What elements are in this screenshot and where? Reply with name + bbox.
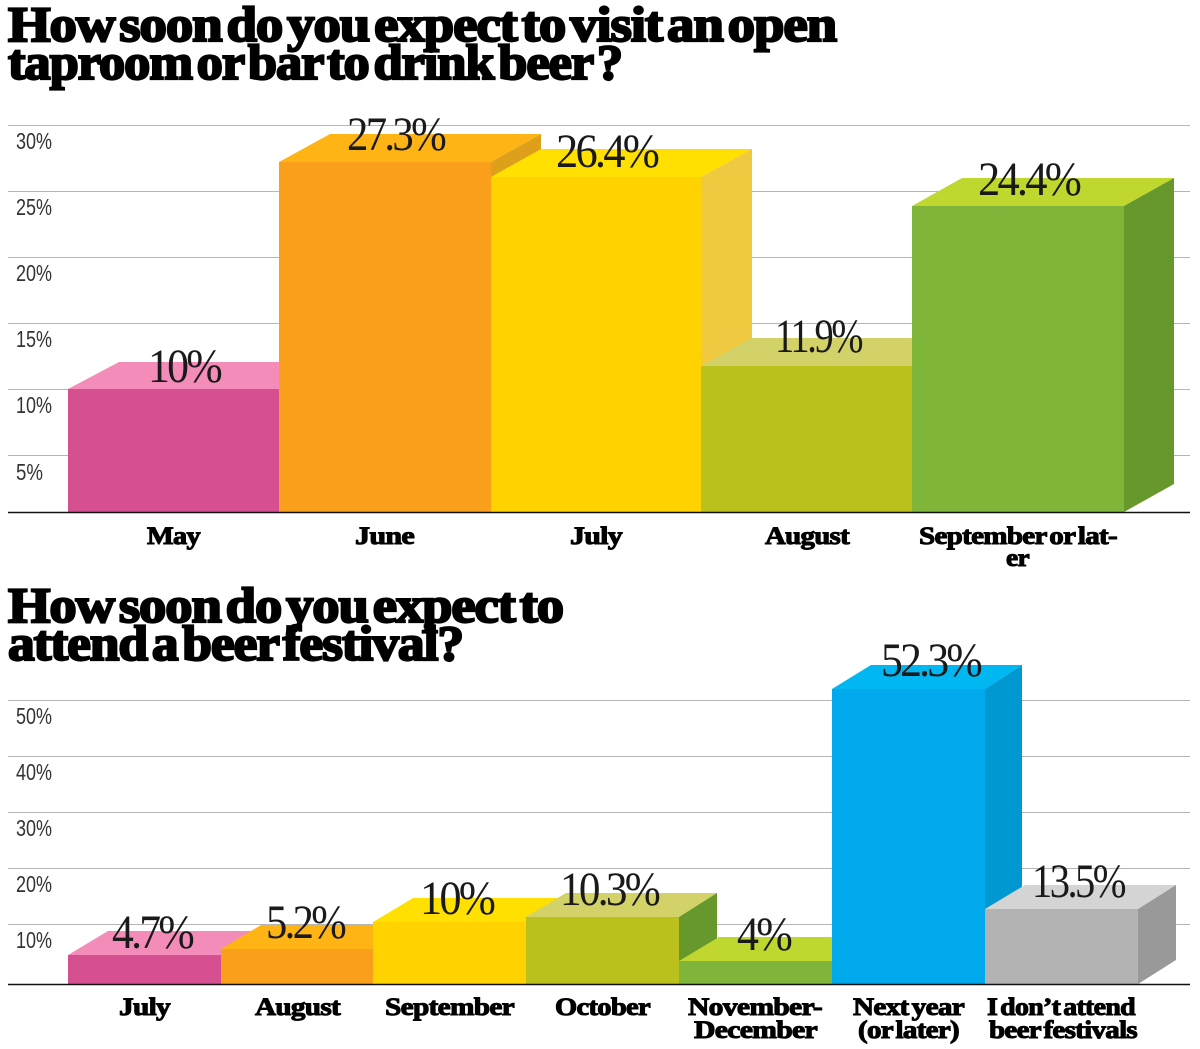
bar: June 27.3% [279, 134, 541, 512]
gridlines and y axis labels: 25% [16, 194, 52, 220]
value labels: 4% [737, 908, 792, 961]
value labels [148, 108, 1081, 393]
category labels [147, 523, 1117, 572]
gridlines and y axis labels: 20% [16, 871, 52, 897]
title: festival question: How soon do you expect to [8, 577, 563, 633]
bar: July 26.4% [491, 149, 752, 512]
value labels: 26.4% [556, 125, 659, 178]
bar: September or later 24.4% [912, 178, 1174, 512]
bar: Next year 52.3% [832, 665, 1022, 984]
category labels: Next year [853, 994, 965, 1021]
bar: September 10% [373, 898, 566, 984]
category labels: September or lat- [919, 523, 1117, 550]
category labels: August [765, 523, 850, 550]
category labels: er [1006, 545, 1030, 572]
value labels [112, 634, 1126, 961]
value labels: 10% [420, 872, 495, 925]
category labels: August [255, 994, 341, 1021]
gridlines and y axis labels: 10% [16, 392, 52, 418]
category labels: (or later) [858, 1017, 959, 1044]
gridlines and y axis labels [8, 126, 1190, 485]
bar: August 5.2% [221, 925, 413, 984]
category labels: October [555, 994, 651, 1021]
chart: beer festival timing [8, 634, 1190, 1044]
gridlines and y axis labels: 40% [16, 759, 52, 785]
value labels: 11.9% [775, 310, 863, 363]
bar: October 10.3% [526, 893, 717, 984]
value labels: 10.3% [560, 863, 660, 916]
gridlines and y axis labels: 5% [16, 459, 43, 485]
bar: May 10% [68, 362, 330, 512]
value labels: 24.4% [978, 153, 1081, 206]
gridlines and y axis labels: 15% [16, 326, 52, 352]
value labels: 10% [148, 340, 222, 393]
gridlines and y axis labels: 30% [16, 815, 52, 841]
category labels: June [355, 523, 415, 550]
category labels: I don’t attend [987, 994, 1136, 1021]
value labels: 27.3% [347, 108, 446, 161]
title: taproom question: taproom or bar to drink beer ? [8, 34, 622, 90]
category labels: November- [688, 994, 822, 1021]
gridlines and y axis labels: 20% [16, 260, 52, 286]
category labels [119, 994, 1138, 1044]
chart: taproom visit timing [8, 108, 1190, 572]
category labels: September [385, 994, 515, 1021]
bar: November-December 4% [679, 937, 872, 984]
gridlines and y axis labels: 10% [16, 927, 52, 953]
category labels: July [570, 523, 623, 550]
category labels: December [694, 1017, 818, 1044]
gridlines and y axis labels [8, 700, 1190, 953]
category labels: July [119, 994, 171, 1021]
bar: July 4.7% [68, 931, 261, 984]
title: festival question: attend a beer festival? [8, 615, 463, 671]
category labels: May [147, 523, 201, 550]
gridlines and y axis labels: 30% [16, 128, 52, 154]
title: taproom question [8, 0, 837, 90]
value labels: 5.2% [266, 896, 346, 949]
bar: I don't attend 13.5% [985, 885, 1176, 984]
bar: August 11.9% [701, 338, 963, 512]
title: festival question [8, 577, 563, 671]
value labels: 4.7% [112, 906, 194, 959]
value labels: 52.3% [881, 634, 982, 687]
category labels: beer festivals [989, 1017, 1138, 1044]
gridlines and y axis labels: 50% [16, 703, 52, 729]
value labels: 13.5% [1032, 855, 1126, 908]
